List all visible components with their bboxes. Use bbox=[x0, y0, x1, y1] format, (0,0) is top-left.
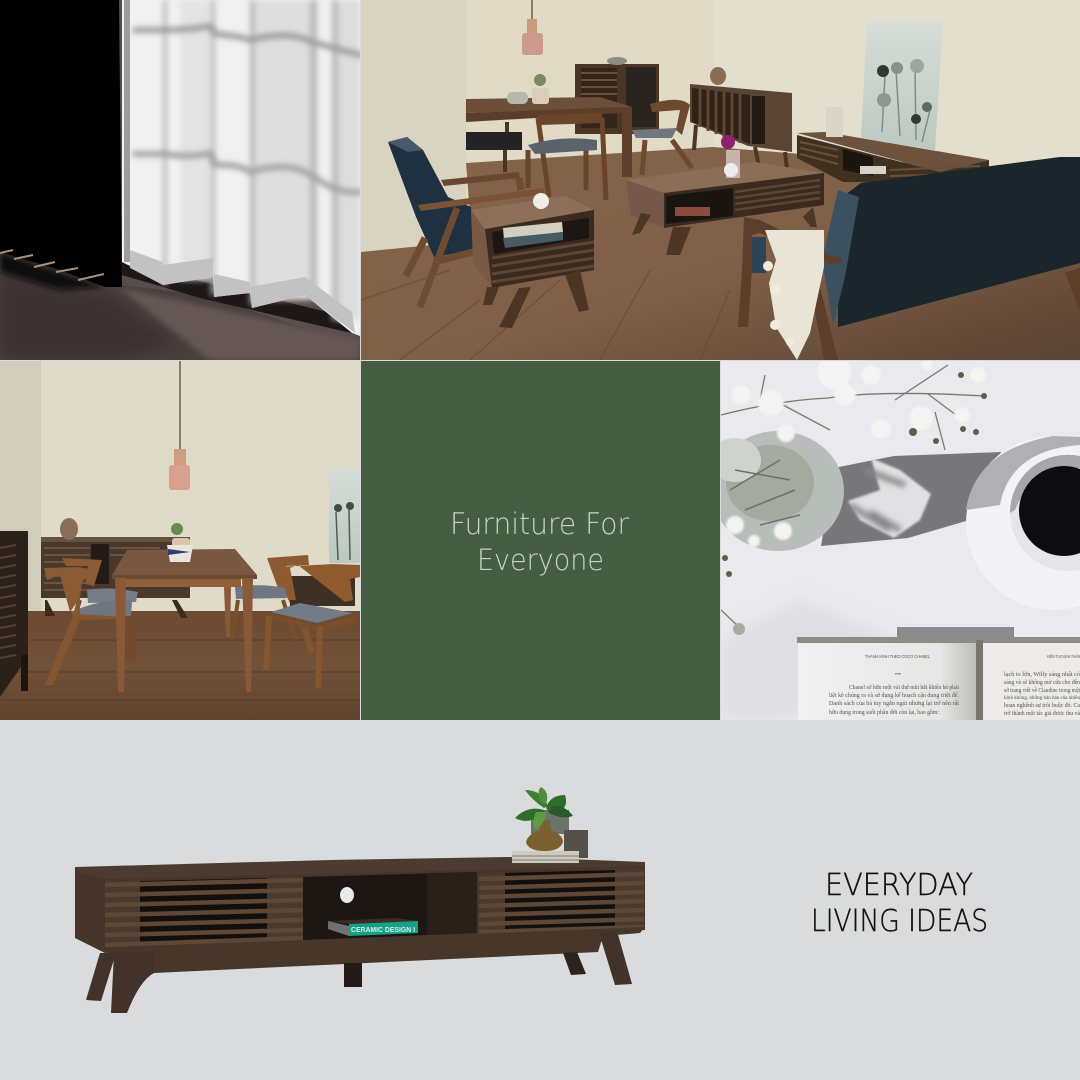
heading: everyday living ideas: EVERYDAY bbox=[825, 868, 973, 903]
heading: everyday living ideas: LIVING IDEAS bbox=[811, 904, 988, 939]
decor: plant in brass pot and books bbox=[512, 787, 588, 863]
console top bbox=[75, 857, 645, 880]
heading: everyday living ideas bbox=[811, 868, 988, 939]
shadow bbox=[821, 452, 1001, 546]
left cabinet bbox=[0, 531, 28, 697]
pendant lamp bbox=[522, 0, 543, 55]
TV console bbox=[797, 107, 989, 182]
book: ceramic design: CERAMIC DESIGN I bbox=[351, 925, 415, 934]
baby's breath flowers bbox=[726, 355, 986, 547]
wall painting bbox=[861, 22, 943, 150]
open book: ••• bbox=[895, 672, 901, 678]
sheer curtain bbox=[122, 0, 360, 336]
right slat door bbox=[479, 868, 644, 933]
photo: dining room bbox=[0, 361, 360, 720]
sunlight slits on carpet bbox=[0, 250, 104, 280]
left slat door bbox=[105, 877, 303, 947]
book: ceramic design bbox=[328, 918, 418, 936]
coffee table bbox=[626, 135, 824, 255]
title: Furniture For Everyone: Furniture For bbox=[450, 507, 629, 541]
left chairs bbox=[44, 558, 138, 685]
console body bbox=[75, 866, 645, 953]
coffee cup and saucer bbox=[966, 436, 1080, 610]
title: Furniture For Everyone bbox=[450, 507, 629, 577]
lower rail bbox=[105, 927, 645, 973]
title: Furniture For Everyone: Everyone bbox=[477, 543, 604, 577]
photo: curtain bbox=[0, 0, 360, 360]
glass vase bbox=[709, 431, 844, 551]
legs bbox=[86, 931, 632, 1013]
open niche bbox=[303, 872, 477, 940]
sofa bbox=[738, 157, 1080, 360]
open book: Chanel sở hữu một vài thứ mũi hắt khiến bà phải bbox=[849, 684, 959, 691]
blanket bbox=[763, 230, 824, 360]
painting bbox=[329, 468, 360, 563]
dining table bbox=[466, 74, 632, 177]
photo: coffee and book flat lay bbox=[709, 355, 1080, 720]
blackout curtain bbox=[0, 0, 122, 287]
product: TV console bbox=[75, 787, 645, 1013]
back sideboard bbox=[41, 518, 190, 618]
flower buds bbox=[722, 372, 987, 635]
right chair back bbox=[232, 555, 355, 655]
photo: living room bbox=[361, 0, 1080, 360]
open book: hữu dụng trong suốt phần đời còn lại, bao gồm: bbox=[829, 709, 939, 716]
open book: THÁNH KINH THEO COCO CHANEL bbox=[865, 653, 930, 660]
armchair bbox=[388, 137, 544, 307]
dining table bbox=[112, 523, 257, 692]
baby's breath stems bbox=[721, 365, 985, 628]
pendant lamp bbox=[169, 361, 190, 490]
open book: liệt kê chúng ra và sử dụng kế hoạch cận dung triệt để. bbox=[829, 692, 959, 699]
right chair front bbox=[266, 564, 360, 688]
bookcase bbox=[575, 57, 659, 134]
open book bbox=[797, 627, 1080, 720]
sideboard bbox=[690, 67, 792, 178]
dining chairs bbox=[528, 100, 692, 200]
panel: green title tile bbox=[361, 361, 720, 720]
open book: Danh sách của bà tuy ngắn ngủi nhưng lại trở nên rất bbox=[829, 700, 959, 707]
side table bbox=[471, 193, 594, 328]
